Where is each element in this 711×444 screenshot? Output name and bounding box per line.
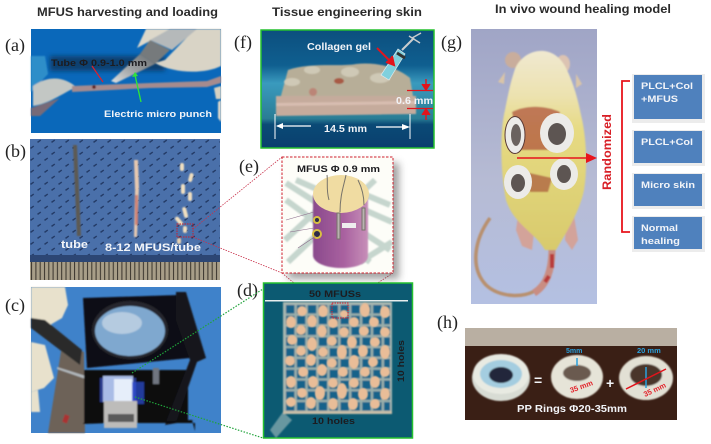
dashed frame xyxy=(282,157,393,273)
ring dimensions: 35 mm xyxy=(642,380,668,399)
label: PP rings: PP Rings Φ20-35mm xyxy=(517,404,627,415)
panel c: magnifier loading photo xyxy=(31,287,221,433)
label: 10 holes vertical: 10 holes xyxy=(396,340,407,382)
label: 10 holes horizontal: 10 holes xyxy=(312,416,355,427)
ears xyxy=(505,52,521,68)
icon: syringe xyxy=(381,33,421,80)
dimension: 14.5 mm: 14.5 mm xyxy=(324,124,367,135)
ring dimensions xyxy=(566,346,668,399)
selected square xyxy=(332,303,348,318)
tail xyxy=(476,218,536,295)
box: Normal healing: healing xyxy=(641,236,680,247)
box: Micro skin: Micro skin xyxy=(641,180,695,191)
panel e: MFUS schematic xyxy=(282,157,399,279)
label: Randomized: Randomized xyxy=(602,114,614,190)
box: Normal healing: Normal xyxy=(641,223,678,234)
rings xyxy=(504,113,578,199)
box: Micro skin xyxy=(632,173,705,209)
zoom connector: c to d xyxy=(132,289,263,438)
cylinder body xyxy=(313,195,368,268)
box: PLCL+Col+MFUS: PLCL+Col xyxy=(641,81,693,92)
label: collagen gel: Collagen gel xyxy=(307,42,371,53)
thickness markers: 0.6 mm xyxy=(396,96,433,107)
panel label e: (e) xyxy=(239,156,259,177)
wound xyxy=(512,107,560,150)
title: Tissue engineering skin: Tissue engineering skin xyxy=(272,5,422,19)
zoom connector: b to e xyxy=(193,157,393,303)
label: MFUS diameter: MFUS Φ 0.9 mm xyxy=(297,164,380,175)
thickness markers xyxy=(396,79,433,120)
panel label c: (c) xyxy=(5,295,25,316)
panel label a: (a) xyxy=(5,35,25,56)
label: tube: tube xyxy=(61,239,88,251)
sebaceous glands xyxy=(313,217,321,238)
scaffold mesh xyxy=(270,302,392,438)
MFUS pieces xyxy=(285,303,390,410)
body xyxy=(501,51,586,250)
panel label d: (d) xyxy=(237,280,258,301)
label: electric micro punch: Electric micro punch xyxy=(104,109,212,120)
label: 50 MFUSs: 50 MFUSs xyxy=(309,289,361,300)
equals sign: = xyxy=(534,372,542,388)
arrow: randomized xyxy=(517,157,588,159)
panel d: scaffold grid photo xyxy=(264,283,412,438)
title: MFUS harvesting and loading: MFUS harvesting and loading xyxy=(37,5,218,19)
bracket xyxy=(622,81,630,232)
cylinder top xyxy=(313,175,369,213)
group boxes xyxy=(632,74,705,252)
feet xyxy=(516,216,534,250)
panel a: tail punch photo xyxy=(31,29,221,133)
panel h: PP rings photo xyxy=(465,328,677,420)
hair shafts xyxy=(327,175,365,239)
panel label g: (g) xyxy=(441,32,462,53)
label: tube diameter: Tube Φ 0.9-1.0 mm xyxy=(51,58,147,69)
label: 8-12 MFUS per tube: 8-12 MFUS/tube xyxy=(105,242,201,254)
ring dimensions: 5mm xyxy=(566,348,582,355)
box: PLCL+Col+MFUS xyxy=(632,74,705,123)
panel label h: (h) xyxy=(437,312,458,333)
panel label f: (f) xyxy=(234,32,252,53)
panel f: tissue engineered skin photo xyxy=(261,30,434,148)
title: In vivo wound healing model: In vivo wound healing model xyxy=(495,2,671,16)
panel b: harvested tubes photo xyxy=(30,139,220,280)
box: PLCL+Col xyxy=(632,130,705,166)
plus sign: + xyxy=(606,375,614,391)
box: PLCL+Col: PLCL+Col xyxy=(641,137,693,148)
box: PLCL+Col+MFUS: +MFUS xyxy=(641,94,678,105)
box: Normal healing xyxy=(632,216,705,252)
arrow: collagen gel xyxy=(377,48,394,65)
selection square xyxy=(177,224,193,237)
dimension: 14.5 mm xyxy=(275,114,410,139)
panel g: rat photo xyxy=(471,29,597,304)
ring dimensions: 35 mm xyxy=(569,378,594,395)
panel label b: (b) xyxy=(5,141,26,162)
ring dimensions: 20 mm xyxy=(637,346,661,355)
